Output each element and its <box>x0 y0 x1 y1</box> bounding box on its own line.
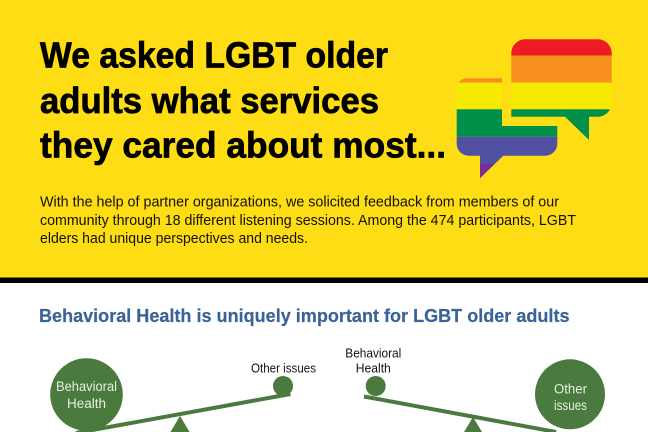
chart: right seesaw, other issues outweigh behavioral health <box>345 347 605 432</box>
large circle label: Health <box>67 396 106 411</box>
intro text block <box>40 194 576 247</box>
seesaw fulcrum <box>461 417 485 432</box>
title: adults what services <box>40 80 379 121</box>
title: We asked LGBT older <box>40 34 388 76</box>
seesaw beam <box>364 396 556 432</box>
small circle label: Other issues <box>251 362 316 376</box>
title: they cared about most... <box>40 124 446 166</box>
section heading: Behavioral Health is uniquely important for LGBT older adults <box>39 305 570 326</box>
black divider band <box>0 278 648 283</box>
large circle: other issues <box>535 359 605 429</box>
intro text block: With the help of partner organizations, we solicited feedback from members of our <box>40 194 559 210</box>
large circle label: Behavioral <box>56 379 117 394</box>
large circle label: Other <box>554 381 587 396</box>
large circle label <box>56 379 117 411</box>
intro text block: elders had unique perspectives and needs. <box>40 230 308 247</box>
title <box>40 34 446 166</box>
chart: left seesaw, behavioral health outweighs other issues <box>50 358 316 432</box>
icon: left speech bubble <box>456 78 558 178</box>
large circle: behavioral health <box>50 358 123 431</box>
small circle label: Health <box>356 362 391 376</box>
small circle: other issues <box>273 376 293 396</box>
icon: rainbow speech bubbles <box>456 39 612 178</box>
seesaw fulcrum <box>168 416 192 432</box>
seesaw beam <box>76 394 290 432</box>
small circle: behavioral health <box>366 376 386 396</box>
large circle label: issues <box>554 398 587 413</box>
panel: yellow header background <box>0 0 648 278</box>
icon: right speech bubble <box>511 39 612 140</box>
small circle label: Behavioral <box>345 347 401 361</box>
large circle label <box>554 381 587 413</box>
intro text block: community through 18 different listening sessions. Among the 474 participants, LGBT <box>40 212 576 229</box>
small circle label <box>345 347 401 376</box>
